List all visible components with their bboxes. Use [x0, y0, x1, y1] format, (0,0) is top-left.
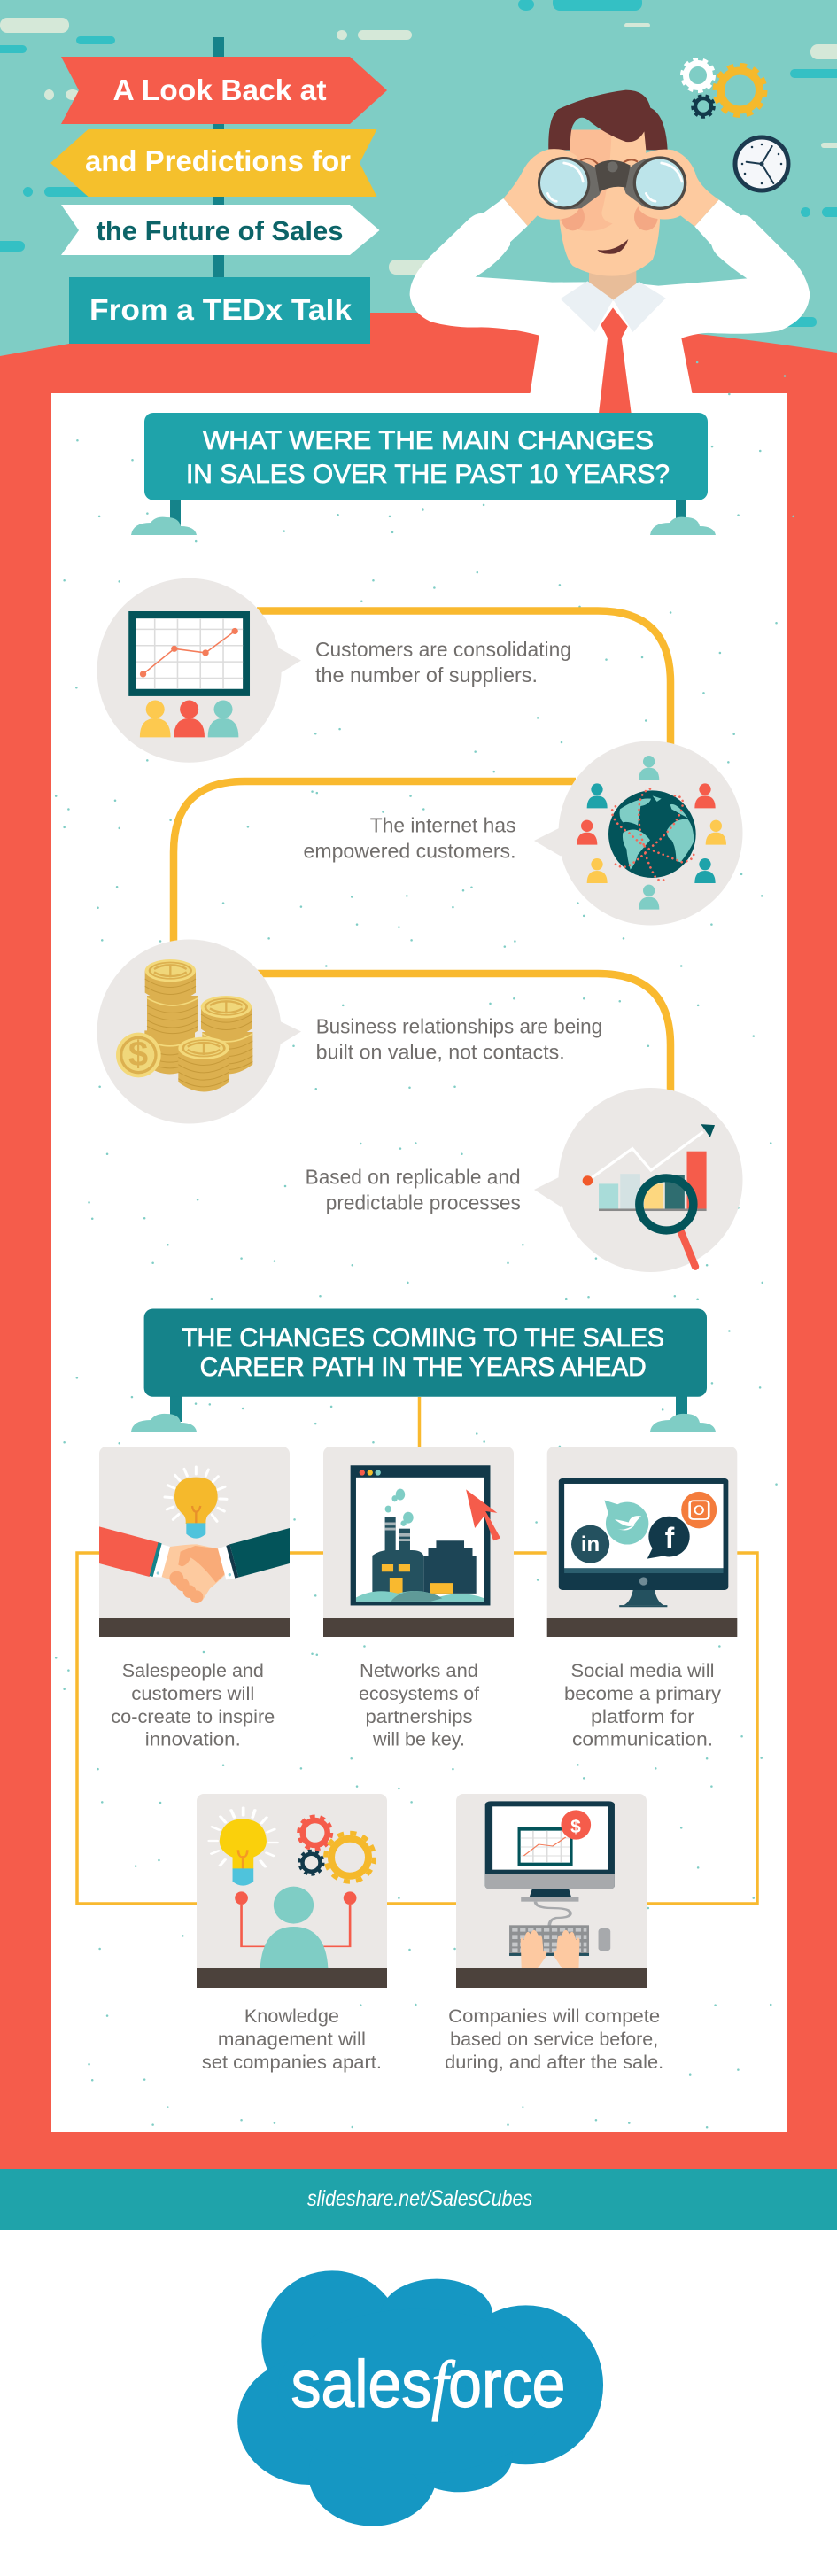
- icon: dollar on monitor: $: [570, 1817, 581, 1837]
- card 5: service: Companies will compete: [448, 2006, 660, 2027]
- icon: monitor with social bubbles: [559, 1478, 728, 1607]
- card 2: networks: Networks and: [360, 1661, 478, 1681]
- icon: red gear: [298, 1816, 331, 1850]
- sign: A Look Back at: A Look Back at: [113, 74, 327, 106]
- card 1: co-create: innovation.: [145, 1730, 241, 1750]
- sign: and Predictions for: and Predictions for: [85, 144, 351, 177]
- card 4: knowledge management: management will: [218, 2029, 366, 2050]
- icon: dark gear: [299, 1851, 323, 1874]
- sign: the Future of Sales: [61, 205, 379, 255]
- background clouds: [0, 0, 837, 327]
- heading: career path changes: THE CHANGES COMING TO THE SALES: [182, 1323, 664, 1353]
- icon: coin stacks: [116, 959, 252, 1091]
- card 1: co-create: Salespeople and: [122, 1661, 264, 1681]
- signpost pole: [213, 37, 224, 281]
- heading: career path changes: [131, 1309, 716, 1432]
- item 2: internet empowered customers: empowered customers.: [303, 840, 515, 863]
- salesforce logo: [237, 2270, 603, 2526]
- yellow connector path: [174, 611, 670, 1098]
- card 5: service: [445, 1794, 663, 2073]
- card 1: co-create: co-create to inspire: [111, 1707, 275, 1727]
- icon: dark gear: [693, 96, 714, 117]
- icon: dollar sign on coin: $: [128, 1035, 148, 1074]
- card 3: social media: Social media will: [570, 1661, 714, 1681]
- card 1: co-create: [99, 1447, 290, 1750]
- item 3: business relationships: [97, 939, 602, 1123]
- item 2: internet empowered customers: [303, 741, 742, 925]
- heading: main changes: IN SALES OVER THE PAST 10 YEARS?: [186, 460, 670, 489]
- card 2: networks: [323, 1447, 514, 1750]
- card 3: social media: [547, 1447, 737, 1750]
- card 4: knowledge management: Knowledge: [244, 2006, 339, 2027]
- card 2: networks: partnerships: [365, 1707, 473, 1727]
- item 3: business relationships: Business relationships are being: [316, 1015, 602, 1038]
- item 1: customers consolidating: [97, 578, 571, 763]
- heading: main changes: WHAT WERE THE MAIN CHANGES: [203, 426, 654, 455]
- icon: yellow gear: [715, 66, 765, 115]
- sign: the Future of Sales: the Future of Sales: [96, 215, 344, 246]
- icon: bulb and person: [209, 1808, 356, 1968]
- sign: and Predictions for: [50, 129, 377, 197]
- card 3: social media: communication.: [572, 1730, 713, 1750]
- item 4: replicable processes: Based on replicable and: [306, 1165, 521, 1188]
- icon: clock: [735, 137, 788, 190]
- red body background: [0, 313, 837, 2169]
- item 1: customers consolidating: the number of suppliers.: [315, 663, 538, 687]
- icon: chart and audience: [128, 611, 250, 737]
- scattered dots: [56, 362, 794, 2127]
- card 3: social media: become a primary: [564, 1684, 722, 1704]
- item 1: customers consolidating: Customers are consolidating: [315, 638, 571, 661]
- footer band: [0, 2169, 837, 2230]
- card 2: networks: ecosystems of: [359, 1684, 479, 1704]
- card 2: networks: will be key.: [372, 1730, 465, 1750]
- item 4: replicable processes: [306, 1088, 742, 1272]
- salesforce logo: salesforce: [291, 2347, 565, 2422]
- item 3: business relationships: built on value, not contacts.: [316, 1041, 565, 1064]
- icon: LinkedIn label: in: [581, 1532, 600, 1556]
- footer URL: slideshare.net/SalesCubes: [307, 2186, 532, 2211]
- icon: computer, keyboard, hands: [485, 1801, 615, 1968]
- sign: A Look Back at: [61, 57, 387, 124]
- icon: yellow gear: [326, 1833, 374, 1882]
- icon: handshake and bulb: [99, 1467, 290, 1603]
- icon: white gear: [682, 59, 714, 91]
- card connector lines: [77, 1397, 757, 1904]
- heading: career path changes: CAREER PATH IN THE YEARS AHEAD: [200, 1353, 647, 1382]
- heading: main changes: [131, 413, 716, 535]
- item 2: internet empowered customers: The internet has: [370, 813, 515, 836]
- sign: From a TEDx Talk: From a TEDx Talk: [89, 293, 353, 326]
- card 5: service: based on service before,: [450, 2029, 658, 2050]
- card 5: service: during, and after the sale.: [445, 2052, 663, 2073]
- card 1: co-create: customers will: [131, 1684, 254, 1704]
- item 4: replicable processes: predictable processes: [326, 1191, 521, 1214]
- card 4: knowledge management: set companies apart.: [202, 2052, 382, 2073]
- card 4: knowledge management: [197, 1794, 387, 2073]
- icon: factory in browser window: [351, 1465, 500, 1605]
- icon: globe with people: [577, 756, 726, 910]
- sign: From a TEDx Talk: [69, 277, 370, 344]
- white content panel: [51, 393, 787, 2132]
- icon: Facebook label: f: [665, 1522, 675, 1554]
- icon: bar chart with magnifier: [583, 1124, 715, 1267]
- sky background: [0, 0, 837, 372]
- icon: man with binoculars: [410, 90, 810, 414]
- card 3: social media: platform for: [591, 1707, 694, 1727]
